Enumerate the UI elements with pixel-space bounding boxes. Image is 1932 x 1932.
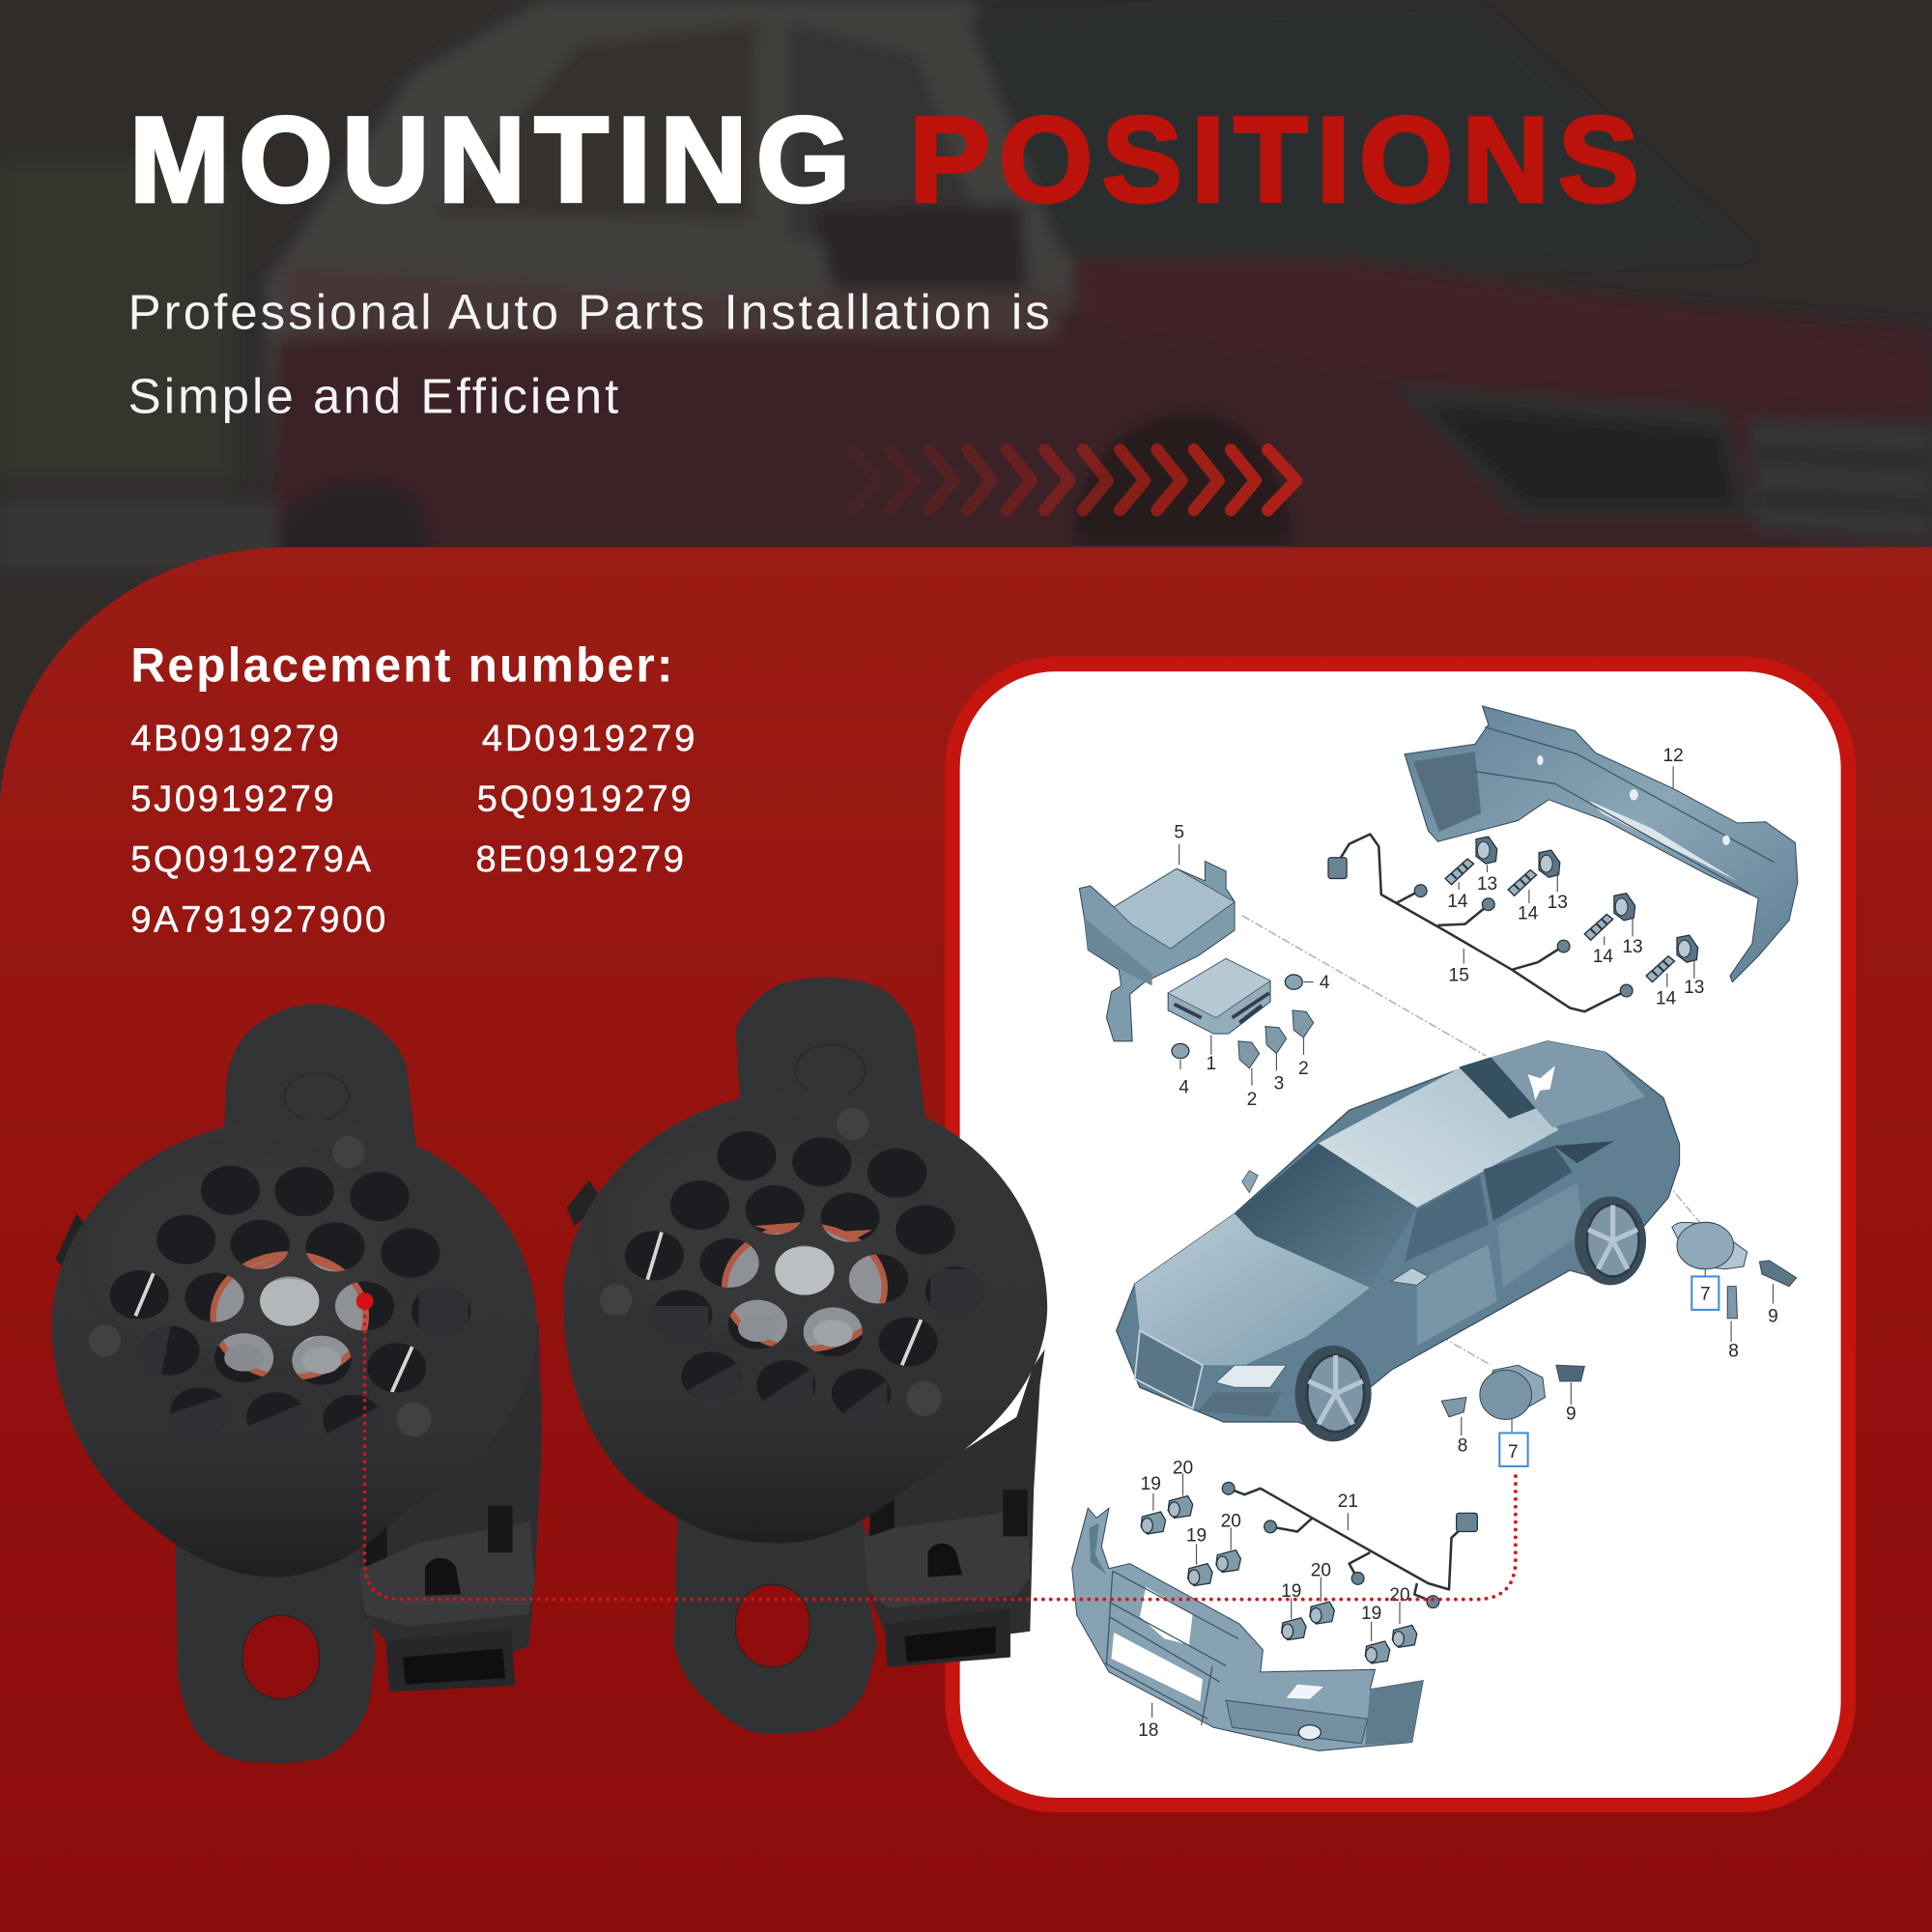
grille holes: [110, 1165, 470, 1444]
replacement numbers text block: 9A791927900: [130, 898, 385, 940]
rear fin: [55, 1213, 93, 1269]
front wiring harness 21: 21: [1338, 1492, 1358, 1512]
control unit bracket 5: [1079, 822, 1235, 1041]
lower mounting tab: [175, 1528, 376, 1763]
background: blurred car photo: [0, 0, 1932, 1010]
front sensors 19 and 20: 20: [1389, 1585, 1410, 1605]
front sensors 19 and 20: 20: [1221, 1511, 1241, 1531]
dotted connector line from buzzer to label 7: [356, 1293, 1516, 1600]
bumps: [89, 1136, 431, 1436]
front sensors 19 and 20: 19: [1186, 1526, 1207, 1547]
upper mounting tab: [735, 977, 927, 1140]
label 12: [1663, 746, 1684, 788]
lower mounting tab: [674, 1503, 877, 1734]
rear sensors 13 and 14: 14: [1593, 947, 1613, 967]
highlighted label 7 front: [1499, 1433, 1528, 1466]
rear sensors 13 and 14: 14: [1656, 989, 1676, 1009]
front wiring harness 21: [1222, 1482, 1477, 1608]
rear sensors 13 and 14: 13: [1548, 893, 1568, 913]
rear bumper: [1405, 706, 1798, 982]
rear wiring harness 15: [1328, 835, 1633, 1011]
title: POSITIONS: [909, 94, 1638, 228]
title: [129, 94, 1638, 228]
product photo: right parking buzzer: [563, 977, 1047, 1734]
front speaker part 7 with clip 9 and bolt 8: [1441, 1365, 1584, 1466]
control unit 1 with connectors 2 and 3 and nuts 4: 2: [1247, 1090, 1257, 1110]
car illustration: [1117, 1041, 1680, 1441]
highlighted label 7 rear: [1691, 1276, 1719, 1310]
label 12: 12: [1663, 746, 1684, 766]
housing body: [52, 1119, 537, 1577]
control unit bracket 5: 5: [1174, 822, 1184, 842]
replacement numbers text block: Replacement number:: [130, 638, 672, 692]
connector housing: [864, 1350, 1045, 1667]
subtitle: Simple and Efficient: [128, 368, 618, 423]
rear sensors 13 and 14: [1445, 837, 1704, 1009]
control unit 1 with connectors 2 and 3 and nuts 4: 3: [1274, 1074, 1284, 1094]
decorative chevron arrows: [853, 450, 1296, 510]
highlighted label 7 rear: 7: [1700, 1285, 1711, 1305]
front sensors 19 and 20: [1141, 1459, 1417, 1663]
rear sensors 13 and 14: 13: [1684, 978, 1704, 998]
product photo: left parking buzzer: [52, 1005, 542, 1763]
control unit 1 with connectors 2 and 3 and nuts 4: [1168, 958, 1330, 1110]
bumps: [600, 1108, 941, 1416]
rear wiring harness 15: 15: [1449, 965, 1469, 985]
soft highlight on speaker face: [616, 1133, 912, 1331]
front bumper: 18: [1138, 1720, 1158, 1741]
rear sensors 13 and 14: 14: [1518, 904, 1539, 924]
subtitle: Professional Auto Parts Installation is: [128, 285, 1050, 340]
control unit 1 with connectors 2 and 3 and nuts 4: 2: [1298, 1059, 1309, 1079]
panel: white diagram card: [952, 665, 1848, 1805]
rear sensors 13 and 14: 14: [1447, 892, 1468, 912]
soft highlight on speaker face: [99, 1158, 394, 1355]
front speaker part 7 with clip 9 and bolt 8: 8: [1458, 1436, 1467, 1457]
highlighted label 7 front: 7: [1508, 1442, 1519, 1463]
panel: red lower section: [0, 547, 1932, 1932]
housing body: [563, 1091, 1047, 1543]
control unit 1 with connectors 2 and 3 and nuts 4: 1: [1207, 1054, 1216, 1074]
upper mounting tab: [223, 1005, 416, 1152]
front sensors 19 and 20: 19: [1361, 1604, 1381, 1624]
control unit 1 with connectors 2 and 3 and nuts 4: 4: [1320, 973, 1330, 993]
front bumper: [1072, 1508, 1423, 1750]
replacement numbers text block: 5J0919279: [130, 778, 334, 819]
replacement numbers text block: 4D0919279: [482, 718, 695, 759]
connector housing: [358, 1322, 542, 1691]
rear speaker part 7 with clip 9 and bolt 8: 9: [1768, 1307, 1778, 1327]
replacement numbers text block: 8E0919279: [475, 838, 684, 880]
subtitle: [128, 285, 1050, 423]
grille holes: [624, 1131, 984, 1413]
replacement numbers text block: 4B0919279: [130, 718, 339, 759]
control unit 1 with connectors 2 and 3 and nuts 4: 4: [1179, 1077, 1189, 1097]
replacement numbers text block: [130, 638, 695, 940]
title: MOUNTING: [129, 94, 850, 228]
rear sensors 13 and 14: 13: [1622, 937, 1643, 957]
front sensors 19 and 20: 19: [1141, 1474, 1161, 1494]
front speaker part 7 with clip 9 and bolt 8: 9: [1566, 1404, 1577, 1424]
front sensors 19 and 20: 20: [1173, 1459, 1193, 1479]
front sensors 19 and 20: 20: [1311, 1560, 1331, 1580]
front sensors 19 and 20: 19: [1281, 1581, 1301, 1602]
rear speaker part 7 with clip 9 and bolt 8: 8: [1728, 1341, 1739, 1361]
rear speaker part 7 with clip 9 and bolt 8: [1672, 1222, 1797, 1361]
parts diagram: [1072, 706, 1798, 1750]
dashed guide lines: [1242, 916, 1703, 1365]
rear sensors 13 and 14: 13: [1477, 874, 1497, 895]
rear fin: [567, 1180, 604, 1226]
replacement numbers text block: 5Q0919279A: [130, 838, 371, 880]
replacement numbers text block: 5Q0919279: [477, 778, 692, 819]
